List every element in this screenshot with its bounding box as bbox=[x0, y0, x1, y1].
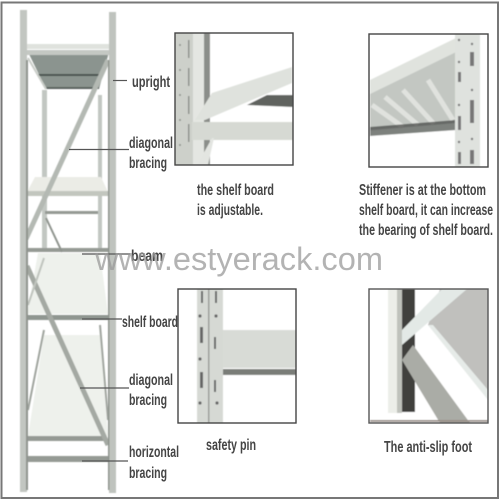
uprights bbox=[20, 10, 116, 493]
shelf board: bottom bbox=[28, 335, 108, 436]
rack illustration bbox=[20, 10, 116, 493]
caption: adjustable shelf board: the shelf board bbox=[197, 182, 274, 199]
label: diagonal bracing lower: bracing bbox=[129, 392, 167, 409]
shelf board: top bbox=[27, 44, 109, 89]
panel: adjustable shelf board bbox=[175, 33, 293, 165]
panel: anti-slip foot bbox=[369, 289, 488, 423]
caption: safety pin: safety pin bbox=[206, 437, 256, 454]
label: shelf board: shelf board bbox=[122, 314, 178, 331]
label: diagonal bracing lower: diagonal bbox=[129, 372, 173, 389]
callout lines bbox=[69, 80, 130, 461]
caption: adjustable shelf board: is adjustable. bbox=[197, 202, 263, 219]
label: horizontal bracing: bracing bbox=[129, 465, 167, 482]
rear posts bbox=[42, 90, 102, 250]
shelf board: second bbox=[27, 177, 108, 192]
label: diagonal bracing upper: diagonal bbox=[129, 135, 173, 152]
horizontal bars bbox=[27, 211, 110, 462]
shelf board: third bbox=[27, 253, 108, 314]
panel: safety pin bbox=[178, 289, 296, 423]
watermark: www.estyerack.com bbox=[94, 241, 383, 277]
label: upright: upright bbox=[132, 74, 170, 91]
panel: stiffener bbox=[369, 34, 488, 167]
label: horizontal bracing: horizontal bbox=[129, 444, 179, 461]
label: beam: beam bbox=[131, 248, 163, 265]
label: diagonal bracing upper: bracing bbox=[129, 155, 167, 172]
diagonal bracing bbox=[26, 60, 108, 445]
